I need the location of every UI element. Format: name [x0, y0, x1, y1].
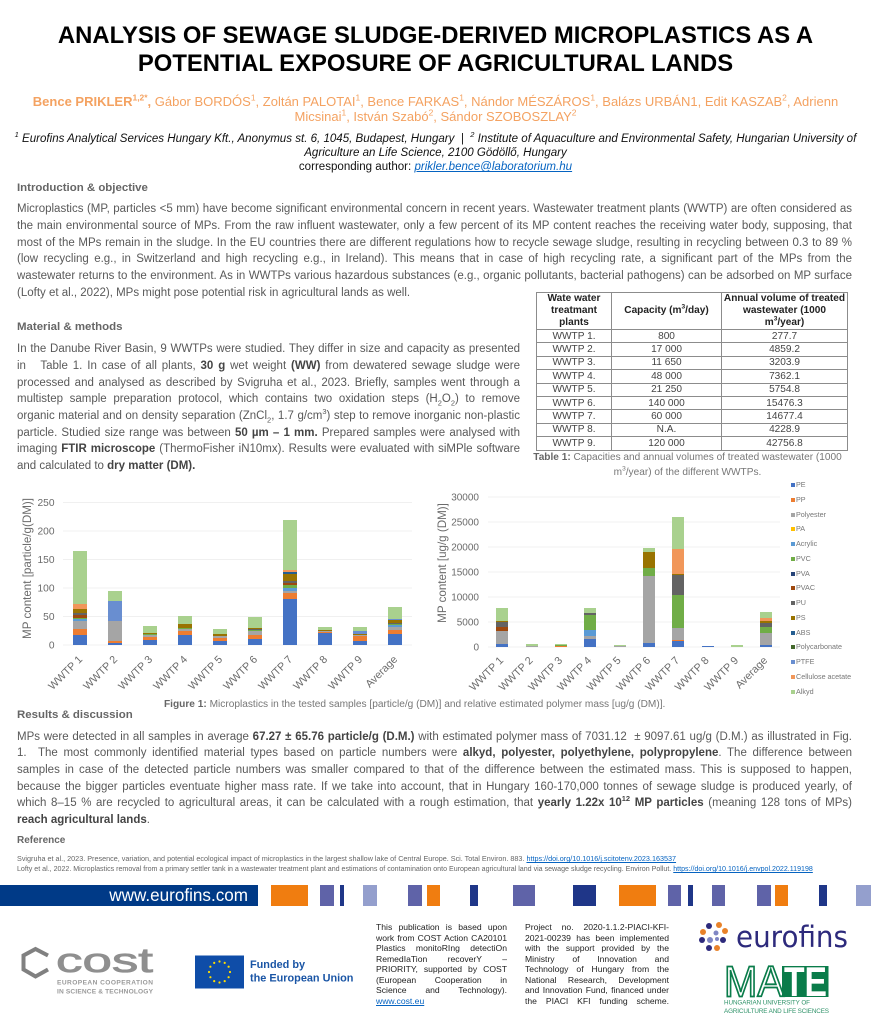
text: material and methods: imaging FTIR microscope (ThermoFisher iN10mx). Results were evaluated with siMPle software: [17, 443, 520, 455]
text: project funding: with the support provided by the: [525, 943, 669, 953]
table: WWTP capacities: 3203.9: [769, 357, 800, 368]
logo: MATE university: [724, 964, 829, 1015]
bar: WWTP 2: [526, 644, 538, 647]
table: WWTP capacities: 4228.9: [769, 424, 800, 435]
text: project funding: Ministry of Innovation and: [525, 954, 669, 964]
chart: particle content: WWTP 8: [291, 654, 330, 693]
text: project funding: 2021-00239 has been implemented: [525, 933, 669, 943]
table: WWTP capacities: 277.7: [772, 331, 797, 342]
table: WWTP capacities: WWTP 2.: [552, 344, 596, 355]
text: introduction: (low recycling e.g., in Switzerland and high recycling e.g., in Ireland). This means that in case of high recycling rate, a significant part of the MPs from the: [17, 253, 852, 265]
bar: WWTP 9: [731, 645, 743, 647]
chart: particle content: WWTP 9: [326, 654, 365, 693]
text: introduction: Microplastics (MP, particles <5 mm) have become significant environmental concern in recent years. Wastewater treatment plants (WWTP) are often considered as: [17, 203, 852, 215]
text: COST acknowledgement: RemedIaTion recoverY –: [376, 954, 507, 964]
references: Svigruha et al., 2023. Presence, variation, and potential ecological impact of microplastics in the largest shallow lake of Central Europe. Sci. Total Environ. 883. https://doi.org/10.1016/j.scitotenv.2023.163537: [17, 854, 676, 863]
bar: WWTP 8: [318, 627, 332, 645]
table: WWTP capacities: Wate water treatmant plants: [548, 293, 600, 328]
text: COST acknowledgement: Science and Technology).: [376, 985, 507, 995]
chart: particle content: WWTP 1: [46, 654, 85, 693]
chart: polymer mass: 20000: [451, 542, 479, 554]
chart: polymer mass: WWTP 2: [497, 655, 536, 694]
bar: WWTP 7: [672, 517, 684, 647]
text: material and methods: and calculated to dry matter (DM).: [17, 460, 195, 472]
chart: polymer mass: 30000: [451, 492, 479, 504]
chart: particle content: 200: [38, 526, 55, 538]
chart: polymer mass: 0: [473, 642, 479, 654]
table: WWTP capacities: 120 000: [648, 438, 685, 449]
legend: Polyester: [796, 510, 826, 519]
legend: PTFE: [796, 657, 814, 666]
legend: PVC: [796, 554, 811, 563]
table: WWTP capacities: WWTP 5.: [552, 384, 596, 395]
chart: particle content: WWTP 2: [81, 654, 120, 693]
chart: polymer mass: Average: [733, 655, 770, 691]
text: results: MPs were detected in all samples in average 67.27 ± 65.76 particle/g (D.M.) with estimated polymer mass of 7031.12 ± 9097.61 ug/g (D.M.) as illustrated in Fig.: [17, 731, 852, 743]
figure caption: Figure 1: Microplastics in the tested samples [particle/g (DM)] and relative estimated polymer mass [ug/g (DM)].: [164, 699, 665, 710]
text: COST acknowledgement: www.cost.eu: [376, 996, 424, 1006]
text: COST acknowledgement: (European Cooperation in: [376, 975, 507, 985]
legend: [791, 480, 851, 696]
chart: polymer mass: 10000: [451, 592, 479, 604]
legend: PA: [796, 524, 805, 533]
table: WWTP capacities: 5754.8: [769, 384, 800, 395]
heading: material and methods: Material & methods: [17, 321, 123, 333]
icon: EU flag: [195, 956, 244, 988]
text: introduction: most of the MPs remain in the sludge. In the EU countries there are different regulations how to recycle sewage sludge, resulting in recycling between 0.3 to 89 %: [17, 237, 852, 249]
bar: WWTP 6: [248, 617, 262, 645]
chart: particle content: Average: [363, 654, 400, 690]
chart: particle content: WWTP 5: [186, 654, 225, 693]
bar: Average: [388, 607, 402, 645]
table: WWTP capacities: 42756.8: [766, 438, 803, 449]
heading: reference: Reference: [17, 835, 65, 846]
text: project funding: Technology of Hungary from the: [525, 964, 669, 974]
legend: Cellulose acetate: [796, 672, 851, 681]
table: WWTP capacities: 800: [658, 331, 675, 342]
chart: polymer mass: WWTP 3: [526, 655, 565, 694]
text: material and methods: processed and analysed as described by Svigruha et al., 2023. Briefly, samples went through a: [17, 377, 520, 389]
table: WWTP capacities: Capacity (m3/day): [624, 304, 709, 316]
table: WWTP capacities: N.A.: [657, 424, 676, 435]
chart: particle content: WWTP 3: [116, 654, 155, 693]
logo: COST: IN SCIENCE & TECHNOLOGY: [57, 988, 154, 996]
chart: particle content: WWTP 7: [256, 654, 295, 693]
text: COST acknowledgement: [376, 922, 507, 1006]
legend: ABS: [796, 628, 810, 637]
references: Lofty et al., 2022. Microplastics removal from a primary settler tank in a wastewater treatment plant and estimations of contamination onto European agricultural land via sewage sludge recycling. Environ Pollut. https://doi.org/10.1016/j.envpol.2022.119198: [17, 865, 813, 873]
table: WWTP capacities: WWTP 1.: [552, 331, 596, 342]
table: WWTP capacities: 17 000: [651, 344, 682, 355]
banner: eurofins website: [0, 885, 871, 906]
chart: particle content: MP content [particle/g(DM)]: [21, 498, 34, 639]
bar: WWTP 6: [643, 548, 655, 647]
table: WWTP capacities: 7362.1: [769, 371, 800, 382]
logo: COST: [22, 944, 154, 996]
table: WWTP capacities: 21 250: [651, 384, 682, 395]
title: POTENTIAL EXPOSURE OF AGRICULTURAL LANDS: [138, 50, 733, 77]
text: results: because the bigger particles eventuate higher mass rate. If we take into account, that in Hungary 160-170,000 tonnes of sewage sludge is produced yearly, of: [17, 781, 852, 793]
chart: polymer mass: WWTP 7: [643, 655, 682, 694]
text: results: reach agricultural lands.: [17, 814, 150, 826]
bar: WWTP 4: [584, 608, 596, 647]
text: COST acknowledgement: PRIORITY, supported by COST: [376, 964, 507, 974]
table: WWTP capacities: Annual volume of treated wastewater (1000 m3/year): [724, 293, 845, 328]
legend: Polycarbonate: [796, 642, 842, 651]
affiliations: Agriculture an Life Science, 2100 Gödöllő, Hungary: [304, 147, 567, 159]
chart: particle content: 50: [43, 612, 55, 623]
text: introduction: wastewater returns to the environment. As in WWTPs various hazardous substances (e.g., organic pollutants, bacterial pathogens) can be adsorbed on MP surface: [17, 270, 852, 282]
text: project funding: [525, 922, 669, 1006]
table: WWTP capacities: WWTP 6.: [552, 398, 596, 409]
logo: funded by the European Union: Funded by: [250, 959, 305, 971]
chart: polymer mass: WWTP 5: [585, 655, 624, 694]
chart: particle content: WWTP 4: [151, 654, 190, 693]
bar: Average: [760, 612, 772, 647]
table: WWTP capacities: 60 000: [651, 411, 682, 422]
text: COST acknowledgement: work from COST Action CA20101: [376, 933, 507, 943]
chart: polymer mass: MP content [ug/g (DM)]: [436, 503, 449, 623]
table: WWTP capacities: WWTP 3.: [552, 357, 596, 368]
references: [17, 854, 813, 873]
heading: results: Results & discussion: [17, 709, 133, 721]
text: introduction: the main environmental source of MPs. From the raw influent wastewater, only a few percent of its MP content reaches the receiving water body, supposing, that: [17, 220, 852, 232]
table: WWTP capacities: WWTP 9.: [552, 438, 596, 449]
bar: WWTP 3: [143, 626, 157, 645]
text: project funding: Project no. 2020-1.1.2-PIACI-KFI-: [525, 922, 669, 932]
banner: eurofins website: www.eurofins.com: [109, 886, 248, 905]
chart: polymer mass: 15000: [451, 568, 479, 578]
heading: introduction: Introduction & objective: [17, 182, 148, 194]
bar: WWTP 2: [108, 591, 122, 645]
chart: polymer mass: 25000: [451, 518, 479, 528]
text: material and methods: [17, 343, 520, 472]
text: COST acknowledgement: This publication is based upon: [376, 922, 507, 932]
chart: particle content: WWTP 6: [221, 654, 260, 693]
logo: eurofins: eurofins: [736, 920, 848, 954]
text: project funding: National Research, Development: [525, 975, 669, 985]
authors: Bence PRIKLER1,2*, Gábor BORDÓS1, Zoltán PALOTAI1, Bence FARKAS1, Nándor MÉSZÁROS1, Balázs URBÁN1, Edit KASZAB2, Adrienn: [33, 92, 838, 108]
text: introduction: [17, 203, 852, 299]
text: material and methods: in Table 1. In case of all plants, 30 g wet weight (WW) from dewatered sewage sludge were: [17, 360, 520, 372]
legend: PS: [796, 613, 806, 622]
legend: Acrylic: [796, 539, 817, 548]
bar: WWTP 5: [614, 645, 626, 647]
chart: particle content: 0: [49, 640, 55, 652]
table: WWTP capacities: WWTP 4.: [552, 371, 596, 382]
text: project funding: the PIACI KFI funding scheme.: [525, 996, 669, 1006]
table: WWTP capacities: WWTP 7.: [552, 411, 596, 422]
affiliations: corresponding author: prikler.bence@laboratorium.hu: [299, 161, 572, 173]
text: results: samples in case of the detected particle numbers was smaller compared to that of the difference between the estimated mass. This is supposed to happen,: [17, 764, 852, 776]
logo: COST: EUROPEAN COOPERATION: [57, 980, 153, 986]
chart: polymer mass: WWTP 9: [702, 655, 741, 694]
title: [58, 22, 813, 77]
bar: WWTP 1: [496, 608, 508, 647]
text: material and methods: particle. Studied size range was between 50 µm – 1 mm. Prepared samples were analysed with: [17, 427, 520, 439]
chart: polymer mass: WWTP 4: [555, 655, 594, 694]
legend: PVA: [796, 569, 810, 578]
table: WWTP capacities: 48 000: [651, 371, 682, 382]
legend: PU: [796, 598, 806, 607]
chart: polymer mass: WWTP 1: [467, 655, 506, 694]
affiliations: 1 Eurofins Analytical Services Hungary Kft., Anonymus st. 6, 1045, Budapest, Hungary | 2 Institute of Aquaculture and Environmental Safety, Hungarian University of: [15, 130, 856, 144]
text: results: [17, 731, 852, 826]
bar: WWTP 4: [178, 616, 192, 645]
table: WWTP capacities: 4859.2: [769, 344, 800, 355]
text: project funding: and Innovation Fund, financed under: [525, 985, 669, 995]
table: WWTP capacities: [536, 292, 848, 451]
text: material and methods: In the Danube River Basin, 9 WWTPs were studied. They differ in size and capacity as presented: [17, 343, 520, 355]
text: results: 1. The most commonly identified material types based on particle numbers were alkyd, polyester, polyethylene, polypropylene. The difference between: [17, 747, 852, 759]
bar: WWTP 8: [702, 646, 714, 647]
affiliations: [14, 130, 858, 173]
authors: Micsinai1, István Szabó2, Sándor SZOBOSZLAY2: [295, 107, 576, 124]
legend: Alkyd: [796, 687, 814, 696]
logo: MATE university: HUNGARIAN UNIVERSITY OF: [724, 1000, 810, 1006]
logo: funded by the European Union: the European Union: [250, 972, 353, 984]
title: ANALYSIS OF SEWAGE SLUDGE-DERIVED MICROPLASTICS AS A: [58, 22, 813, 49]
bar: WWTP 5: [213, 629, 227, 645]
chart: particle content: [21, 498, 412, 693]
chart: polymer mass: 5000: [457, 618, 479, 628]
chart: polymer mass: WWTP 8: [673, 655, 712, 694]
table: WWTP capacities: 15476.3: [766, 398, 803, 409]
chart: polymer mass: WWTP 6: [614, 655, 653, 694]
bar: WWTP 1: [73, 551, 87, 645]
text: introduction: (Lofty et al., 2022), MPs might pose potential risk in agricultural lands as well.: [17, 287, 410, 299]
legend: PP: [796, 495, 806, 504]
table: WWTP capacities: 140 000: [648, 398, 685, 409]
chart: particle content: 100: [38, 584, 55, 594]
chart: particle content: 250: [38, 498, 55, 509]
text: COST acknowledgement: Plastics monitoRIng detectiOn: [376, 943, 507, 953]
authors: [33, 92, 838, 124]
table: WWTP capacities: 14677.4: [766, 411, 803, 422]
legend: PE: [796, 480, 806, 489]
bar: WWTP 7: [283, 520, 297, 645]
legend: PVAC: [796, 583, 815, 592]
logo: funded by the European Union: [195, 956, 353, 988]
table: WWTP capacities: WWTP 8.: [552, 424, 596, 435]
chart: particle content: 150: [38, 555, 55, 566]
bar: WWTP 3: [555, 644, 567, 647]
table: WWTP capacities: 11 650: [651, 357, 682, 368]
bar: WWTP 9: [353, 627, 367, 645]
logo: MATE university: AGRICULTURE AND LIFE SCIENCES: [724, 1008, 829, 1015]
table caption: Table 1: Capacities and annual volumes of treated wastewater (1000 m3/year) of the different WWTPs.: [533, 452, 842, 478]
